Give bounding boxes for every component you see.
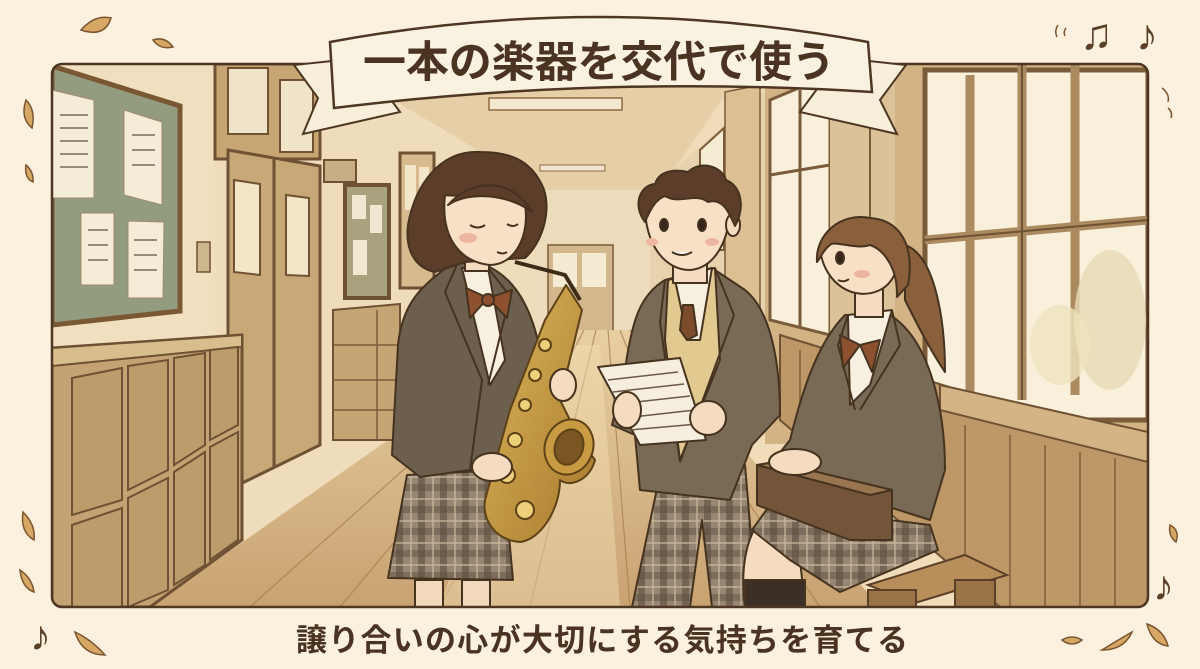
panel: hallway scene — [52, 64, 1148, 610]
corridor pillar — [724, 88, 761, 308]
windows right — [765, 64, 1148, 444]
ribbon tail right — [800, 58, 906, 134]
wall switch — [197, 242, 210, 272]
floor — [150, 330, 880, 607]
character: girl with saxophone — [388, 152, 547, 610]
ponytail — [905, 245, 945, 372]
skirt — [388, 470, 513, 580]
title: 一本の楽器を交代で使う — [363, 39, 835, 87]
blazer — [612, 268, 780, 500]
neck — [464, 262, 490, 272]
icon: music notes: ♪ — [1136, 11, 1158, 60]
hands of girl — [472, 369, 576, 481]
lockers — [52, 335, 242, 607]
motion marks — [1056, 25, 1172, 118]
hair — [638, 166, 741, 226]
icon: music notes: ♪ — [30, 612, 51, 659]
instrument case — [757, 462, 892, 540]
legs — [415, 580, 443, 610]
bulletin board — [52, 66, 180, 325]
bench — [868, 555, 1007, 607]
neck/face — [672, 264, 708, 284]
score sheet — [598, 358, 706, 445]
title ribbon — [294, 17, 906, 134]
corridor left wall detail — [324, 153, 434, 440]
icon: saxophone — [485, 262, 601, 542]
character: boy with score — [598, 166, 780, 607]
left wall — [52, 64, 540, 600]
eyes — [660, 219, 668, 231]
blazer — [392, 262, 540, 478]
icon: music notes: ♫ — [1080, 10, 1113, 59]
right corridor wall — [650, 90, 765, 316]
bow — [466, 288, 512, 318]
upper transom windows — [215, 64, 320, 159]
icon: music notes: ♪ — [1153, 562, 1174, 609]
trousers — [632, 465, 757, 607]
ribbon tail left — [294, 58, 400, 134]
far end of corridor — [547, 244, 614, 330]
hair — [817, 217, 910, 297]
wainscot — [780, 335, 1148, 607]
corridor side windows — [700, 128, 724, 250]
neck & face — [855, 285, 883, 317]
blazer — [770, 315, 945, 520]
face — [444, 195, 526, 265]
ceiling — [398, 88, 740, 190]
legs — [742, 531, 803, 606]
subtitle: 譲り合いの心が大切にする気持ちを育てる — [296, 623, 908, 658]
character: seated girl — [743, 217, 945, 607]
hair back — [407, 152, 547, 272]
sliding doors — [228, 150, 320, 490]
panel border — [52, 64, 1148, 607]
ribbon body — [330, 17, 872, 108]
skirt — [752, 505, 938, 592]
